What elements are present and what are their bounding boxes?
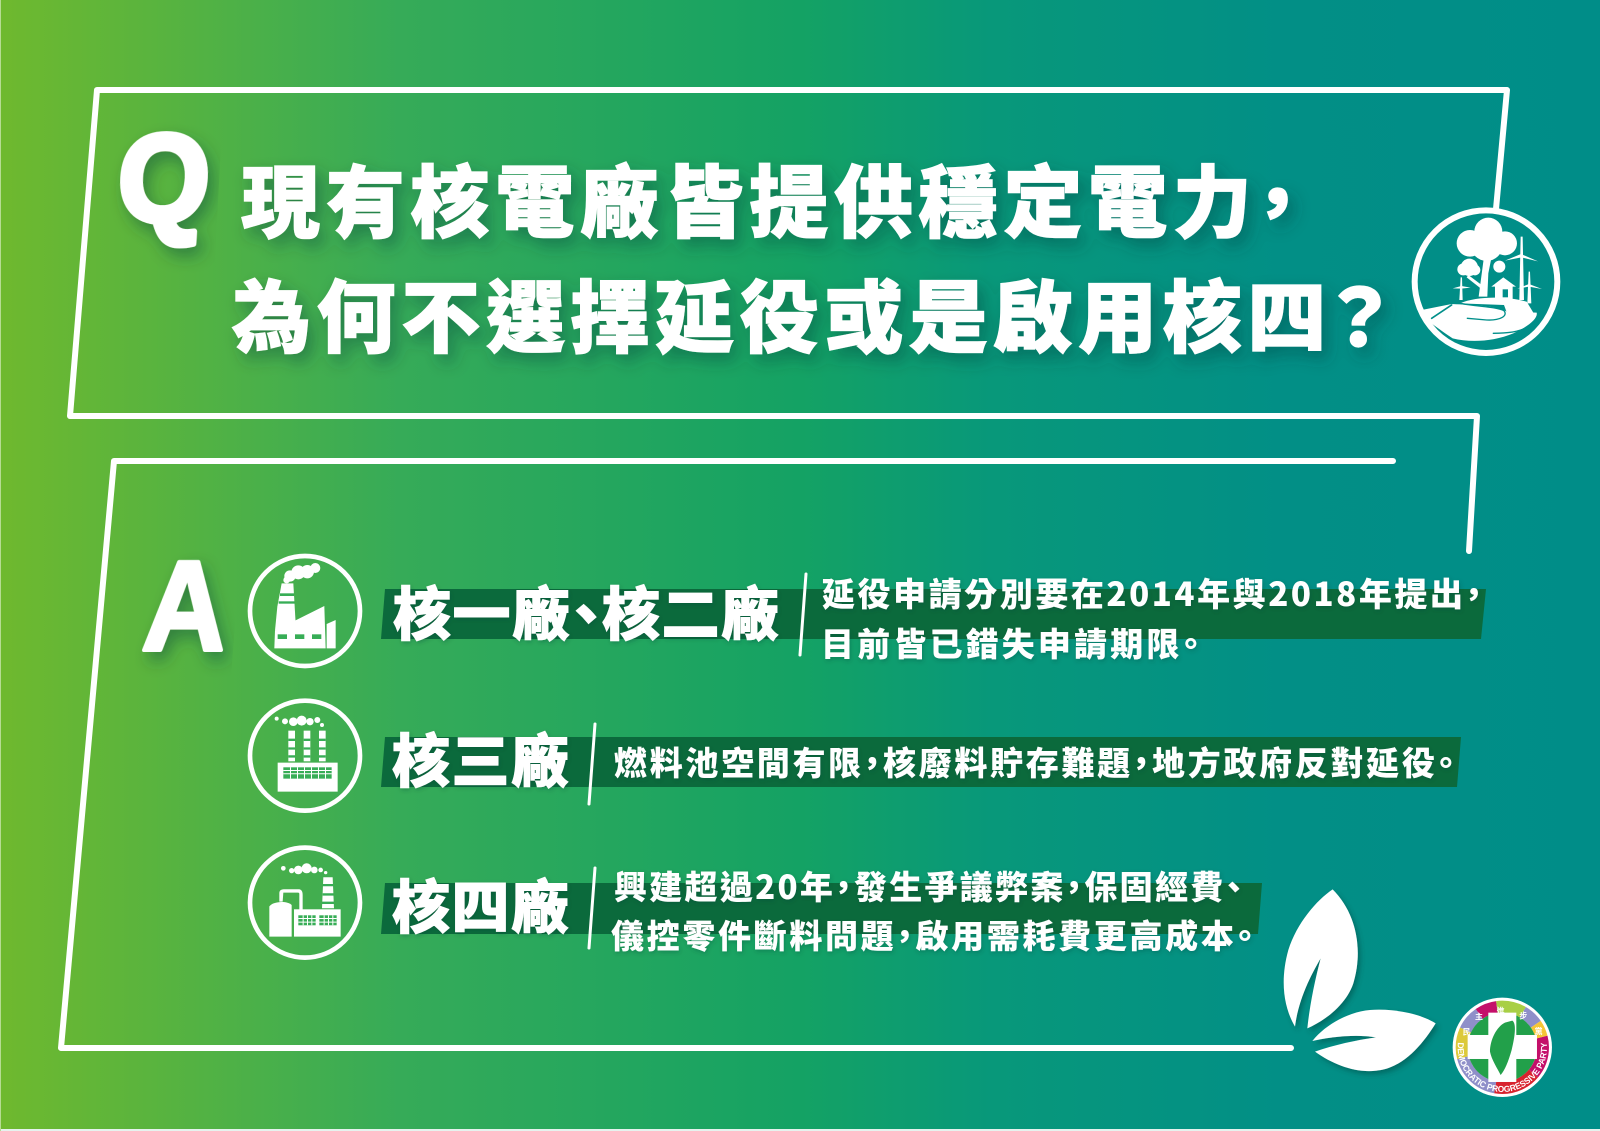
logo: Democratic Progressive Party emblem: DEMOCRATIC PROGRESSIVE PARTY xyxy=(1458,1042,1547,1092)
logo: Democratic Progressive Party emblem xyxy=(1452,998,1552,1097)
logo: Democratic Progressive Party emblem: 民 xyxy=(1463,1028,1471,1037)
row 3 highlight bar xyxy=(381,883,1262,934)
logo: Democratic Progressive Party emblem: 進 xyxy=(1497,1005,1505,1015)
logo: Democratic Progressive Party emblem: 主 xyxy=(1475,1011,1483,1021)
letter A: A xyxy=(139,535,232,677)
row 1 text: 目前皆已錯失申請期限。 xyxy=(821,618,1199,666)
row 3 divider xyxy=(589,868,595,948)
row 1 highlight bar xyxy=(381,589,1486,639)
row 2 highlight bar xyxy=(381,737,1461,787)
question frame xyxy=(70,90,1507,551)
icon: factory 2 xyxy=(250,701,360,811)
row 3 label: 核四廠 xyxy=(392,876,569,941)
logo: Democratic Progressive Party emblem: 黨 xyxy=(1535,1026,1543,1036)
icon: tree, house and wind turbines in hand xyxy=(1415,210,1557,353)
icon: factory 1 xyxy=(250,556,360,666)
row 1 text xyxy=(821,568,1482,666)
row 3 text xyxy=(611,861,1253,958)
row 2 divider xyxy=(589,724,595,804)
letter Q: Q xyxy=(115,108,214,248)
question heading: 現有核電廠皆提供穩定電力， xyxy=(241,159,1297,248)
answer frame xyxy=(61,461,1393,1048)
row 3 text: 儀控零件斷料問題，啟用需耗費更高成本。 xyxy=(611,910,1253,958)
logo: Democratic Progressive Party emblem: 步 xyxy=(1519,1010,1527,1020)
row 2 label: 核三廠 xyxy=(392,730,569,795)
row 3 text: 興建超過20年，發生爭議弊案，保固經費、 xyxy=(614,861,1242,909)
icon: factory 3 xyxy=(250,848,360,958)
question heading xyxy=(232,159,1387,363)
row 1 text: 延役申請分別要在2014年與2018年提出， xyxy=(822,568,1482,616)
question heading: 為何不選擇延役或是啟用核四？ xyxy=(232,274,1387,363)
icon: leaves xyxy=(1284,889,1436,1071)
row 1 divider xyxy=(800,574,806,655)
row 2 text: 燃料池空間有限，核廢料貯存難題，地方政府反對延役。 xyxy=(614,737,1454,785)
row 1 label: 核一廠、核二廠 xyxy=(393,583,779,648)
